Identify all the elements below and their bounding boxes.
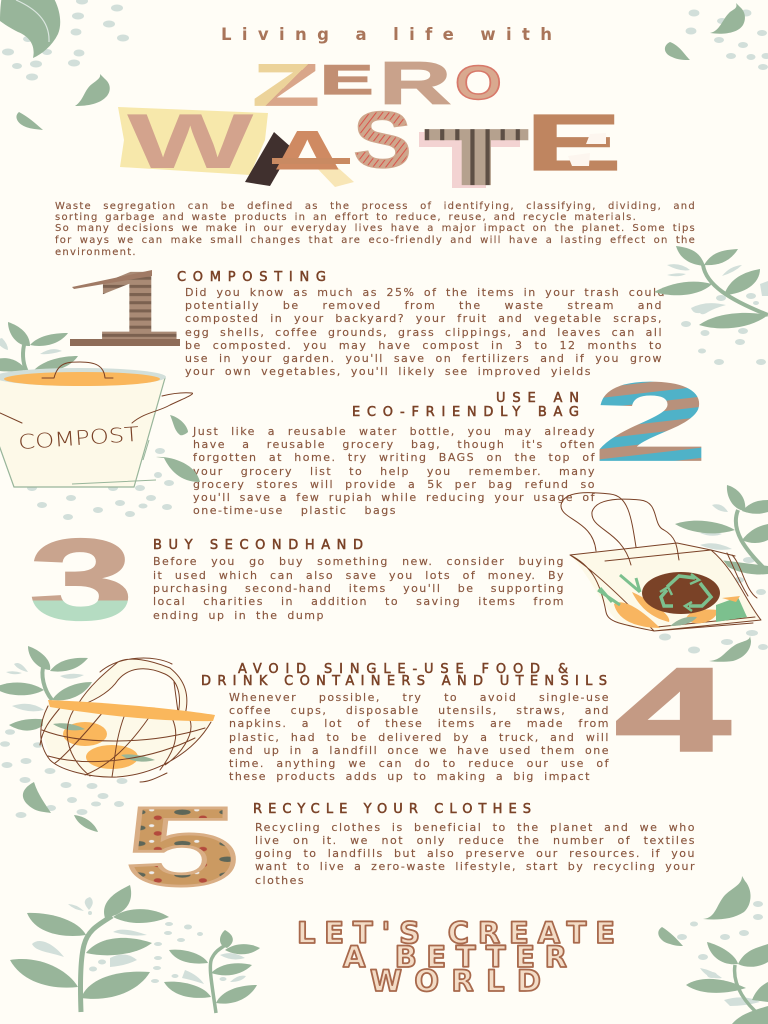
illustration: bottom-left big plant xyxy=(10,885,169,1012)
collage title: WASTE xyxy=(118,95,622,203)
leaves beside bucket xyxy=(156,415,200,482)
text block: buy secondhand: purchasing second-hand items you'll be supporting xyxy=(153,582,565,595)
leaf: top-left large xyxy=(0,0,60,58)
bag handles xyxy=(561,493,636,551)
heading: use an eco-friendly bag xyxy=(352,391,579,420)
collage title: ZERO: R xyxy=(379,50,451,117)
text block: introduction: sorting garbage and waste products in an effort to reduce, reuse, and recycle materials. xyxy=(55,212,637,223)
text block: composting: composted in your backyard? your fruit and vegetable scraps, xyxy=(185,312,663,325)
cream leg of A xyxy=(314,165,354,187)
closing slogan: A BETTER xyxy=(343,940,567,974)
text block: recycle clothes: live on it. we not only reduce the number of textiles xyxy=(255,834,696,847)
handles xyxy=(42,362,113,378)
text block: eco-friendly bag: Just like a reusable water bottle, you may already xyxy=(193,425,596,438)
collage title: ZERO: O xyxy=(455,56,502,110)
illustration: shopping bag with recycle symbol xyxy=(561,485,768,631)
leaves: bottom-right xyxy=(658,876,751,946)
bucket body xyxy=(0,378,165,487)
illustration: compost bucket with plant xyxy=(0,322,193,487)
recycle arrows xyxy=(660,574,711,611)
text block: avoid single-use: these products adds up to making a big impact xyxy=(229,770,591,783)
text block: eco-friendly bag: your grocery list to help you remember. many xyxy=(193,465,596,478)
text block: composting: egg shells, coffee grounds, grass clippings, and leaves can all xyxy=(185,326,663,339)
illustration: net bag with oranges xyxy=(0,646,215,782)
text block: buy secondhand: it used which can also save you lots of money. By xyxy=(153,569,565,582)
orange band xyxy=(48,700,215,721)
number 1: 1 xyxy=(92,251,181,364)
leaves below net bag xyxy=(23,782,98,832)
text block: introduction: for ways we can make small changes that are eco-friendly and will have a lasting effect on the xyxy=(55,235,696,246)
heading: avoid single-use xyxy=(201,662,607,689)
yellow paper behind W xyxy=(118,107,268,175)
text block: eco-friendly bag: forgotten at home. try writing BAGS on the top of xyxy=(193,451,596,464)
text block: avoid single-use: end up in a landfill once we have used them one xyxy=(229,744,610,757)
text block: buy secondhand xyxy=(153,555,565,622)
text block: avoid single-use: plastic, had to be delivered by a truck, and will xyxy=(229,731,610,744)
text block: introduction: environment. xyxy=(55,247,137,258)
bag body xyxy=(43,703,213,777)
handles xyxy=(78,659,187,715)
text block: buy secondhand: ending up in the dump xyxy=(153,609,325,622)
dark leg of A xyxy=(245,132,292,186)
text block: avoid single-use: time. anything we can do to reduce our use of xyxy=(229,757,610,770)
text block: eco-friendly bag: grocery stores will provide a 5k per bag refund so xyxy=(193,478,596,491)
compost label: COMPOST xyxy=(17,422,140,454)
closing slogan: WORLD xyxy=(370,964,541,998)
number 4: 4 xyxy=(616,644,729,775)
plant behind bag xyxy=(675,485,768,574)
illustration: bottom-right plant xyxy=(686,942,768,1024)
closing slogan xyxy=(297,916,615,998)
bag body xyxy=(570,543,761,631)
text block: avoid single-use: napkins. a lot of these items are made from xyxy=(229,717,610,730)
text block: recycle clothes: going to landfills but also preserve our resources. if you xyxy=(255,847,696,860)
small title: Living a life with xyxy=(221,25,552,44)
netting xyxy=(40,706,211,782)
text block: recycle clothes: Recycling clothes is beneficial to the planet and we who xyxy=(255,821,696,834)
recycle badge xyxy=(642,572,720,614)
collage title: ZERO xyxy=(253,50,502,118)
heading: avoid single-use: DRINK CONTAINERS AND UTENSILS xyxy=(201,674,607,689)
collage title: WASTE: A xyxy=(264,114,351,203)
text block: composting: be composted. you may have compost in 3 to 12 months to xyxy=(185,339,663,352)
text block: composting: Did you know as much as 25% of the items in your trash could xyxy=(185,286,666,299)
leaf: top-left small xyxy=(16,74,110,130)
heading: avoid single-use: AVOID SINGLE-USE FOOD & xyxy=(238,662,568,677)
text block: avoid single-use xyxy=(229,691,610,783)
illustration: right plant near composting xyxy=(654,246,768,328)
text block: avoid single-use: Whenever possible, try to avoid single-use xyxy=(229,691,610,704)
plant behind bucket xyxy=(0,322,78,374)
vegetables xyxy=(614,602,660,628)
plant behind net bag xyxy=(0,646,92,731)
text block: recycle clothes: want to live a zero-waste lifestyle, start by recycling your xyxy=(255,860,696,873)
heading: composting: COMPOSTING xyxy=(177,270,326,285)
text block: composting: your own vegetables, you'll likely see improved yields xyxy=(185,365,592,378)
collage title: ZERO: E xyxy=(320,56,373,103)
text block: eco-friendly bag: have a reusable grocery bag, though it's often xyxy=(193,438,596,451)
oranges xyxy=(63,722,107,746)
number 3: 3 xyxy=(29,516,134,644)
heading: buy secondhand: BUY SECONDHAND xyxy=(153,538,363,553)
text block: buy secondhand: Before you go buy something new. consider buying xyxy=(153,555,565,568)
pink paper behind T xyxy=(419,132,520,188)
text block: composting xyxy=(185,286,666,378)
collage title: ZERO: Z xyxy=(253,53,319,118)
collage title: WASTE: W xyxy=(127,98,254,185)
splashes xyxy=(691,303,726,314)
collage title: WASTE: T xyxy=(425,113,528,201)
text block: composting: potentially be removed from the waste stream and xyxy=(185,299,663,312)
text block: recycle clothes: clothes xyxy=(255,874,305,887)
closing slogan: LET'S CREATE xyxy=(297,916,615,950)
heading: recycle your clothes: RECYCLE YOUR CLOTHES xyxy=(253,802,531,817)
number 2: 2 xyxy=(594,360,708,484)
text block: recycle clothes xyxy=(255,821,696,887)
collage title: WASTE: S xyxy=(353,95,412,184)
text block: introduction: Waste segregation can be defined as the process of identifying, classifying, dividing, and xyxy=(55,201,696,212)
leaf: top-right xyxy=(665,3,745,60)
text block: buy secondhand: local charities in addition to saving items from xyxy=(153,595,565,608)
text block: avoid single-use: coffee cups, disposable utensils, straws, and xyxy=(229,704,610,717)
leaf: below bag xyxy=(709,636,751,662)
heading: use an eco-friendly bag: ECO-FRIENDLY BAG xyxy=(352,405,579,420)
collage title: WASTE: E xyxy=(525,98,622,187)
text block: composting: use in your garden. you'll save on fertilizers and if you grow xyxy=(185,352,663,365)
heading: use an eco-friendly bag: USE AN xyxy=(496,391,579,406)
text block: eco-friendly bag: one-time-use plastic bags xyxy=(193,504,397,517)
illustration: bottom-left small plant xyxy=(164,930,260,1013)
text block: eco-friendly bag xyxy=(192,425,596,517)
number 5: 5 xyxy=(125,784,239,909)
bucket rim xyxy=(0,368,166,386)
text block: introduction: So many decisions we make in our everyday lives have a major impact on the planet. Some tips xyxy=(55,223,696,234)
text block: introduction xyxy=(55,201,696,258)
text block: eco-friendly bag: you'll save a few rupiah while reducing your usage of xyxy=(193,491,596,504)
